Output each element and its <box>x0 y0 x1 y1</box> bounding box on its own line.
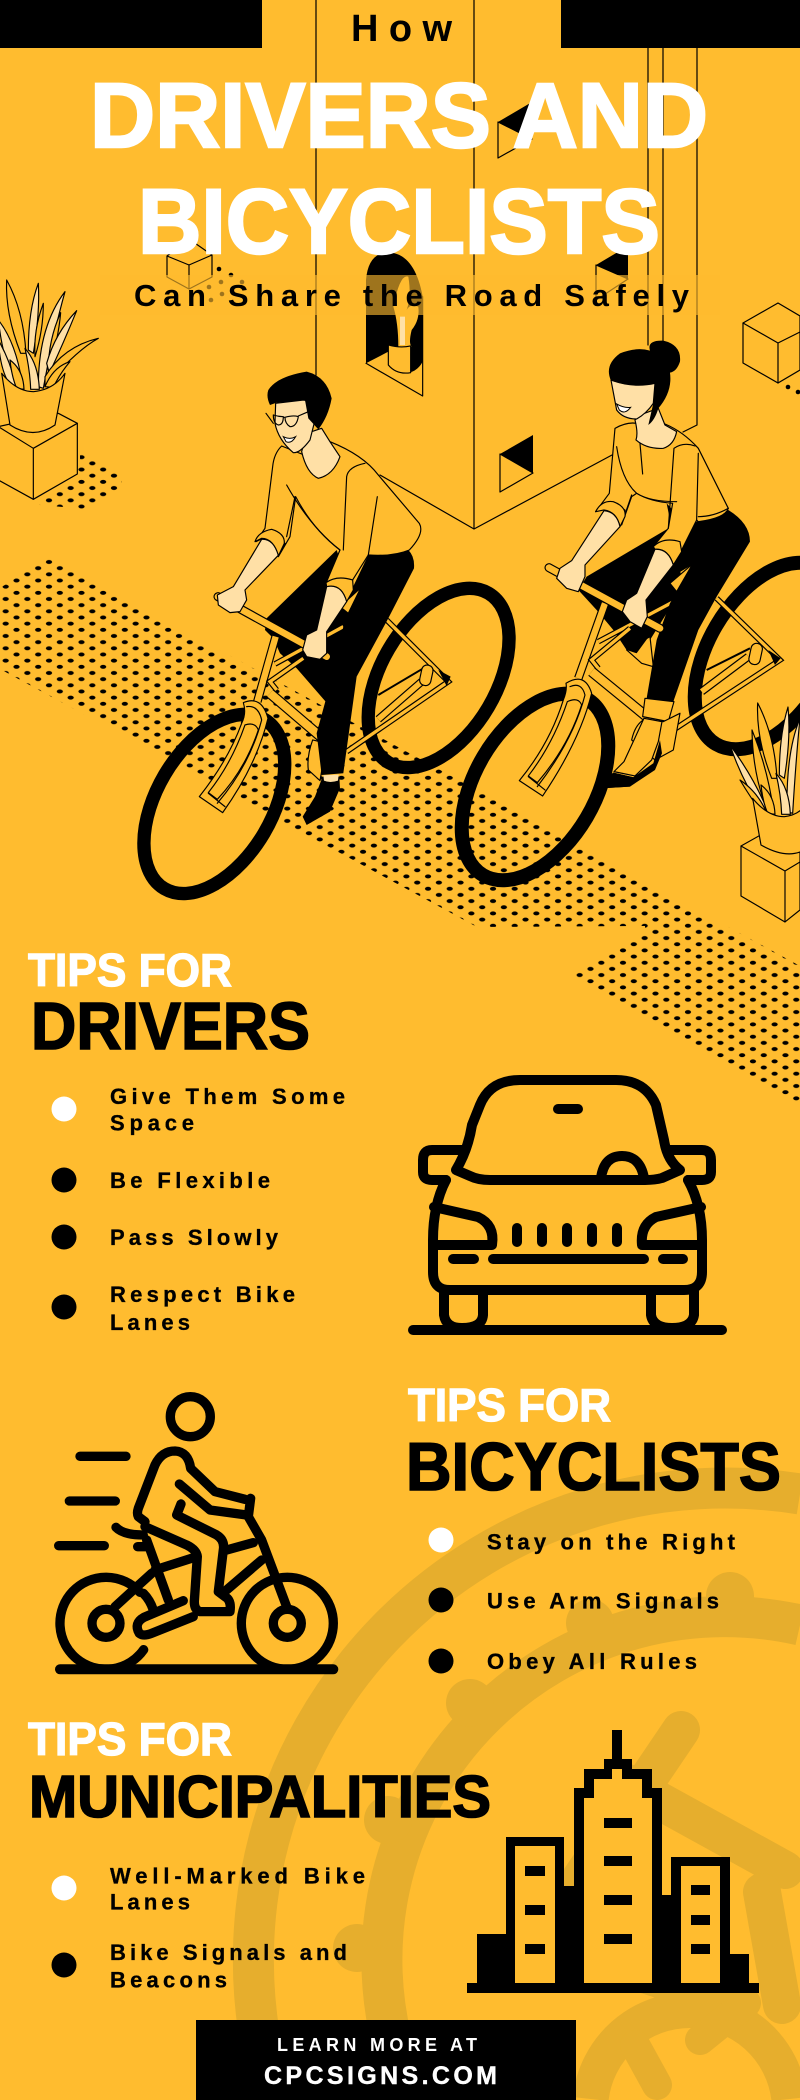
tip: give them some space: Space <box>110 1110 194 1136</box>
woman: frame tubes <box>578 600 677 717</box>
dotted road band <box>0 557 800 1104</box>
title: Bicyclists: BICYCLISTS <box>138 171 660 273</box>
woman: neckline <box>640 443 643 474</box>
heading: tips for drivers: TIPS FOR <box>28 944 232 996</box>
plant left on box <box>0 280 98 499</box>
man: back shoe <box>308 740 327 781</box>
man: hair <box>267 372 332 429</box>
man: frame tubes <box>257 627 343 737</box>
woman: shirt <box>596 423 728 550</box>
heading: tips for bicyclists <box>406 1379 781 1505</box>
heading: tips for bicyclists: TIPS FOR <box>408 1379 611 1431</box>
title: subtitle: Can Share the Road Safely <box>134 278 690 313</box>
cube near title <box>167 239 244 302</box>
man: seat spike <box>340 588 361 613</box>
heading: tips for municipalities <box>28 1713 491 1830</box>
woman: hair <box>609 341 680 425</box>
window: lower <box>500 435 533 492</box>
icon: car front <box>413 1080 722 1330</box>
icon: city buildings <box>467 1730 759 1993</box>
man: right arm <box>303 578 353 659</box>
illustration: isometric building <box>316 0 697 529</box>
man: mouth <box>283 437 296 442</box>
tip: bike signals and beacons <box>52 1940 347 1992</box>
illustration: man on bicycle <box>115 372 538 918</box>
plant right on box <box>730 703 800 922</box>
woman: rear frame <box>663 598 781 737</box>
woman: shoe <box>598 718 662 788</box>
panel: tips for bicyclists <box>406 1379 781 1674</box>
woman: fork <box>519 679 592 796</box>
woman: front wheel <box>431 668 639 906</box>
top bars <box>0 0 800 48</box>
woman: handlebar <box>549 568 660 628</box>
illustration: woman on bicycle <box>431 341 781 906</box>
dots near left box <box>34 449 122 509</box>
tip: bike signals and beacons: Bike Signals and <box>110 1940 347 1965</box>
illustration: woman on bicycle, back wheel <box>664 537 800 775</box>
tip: be flexible: Be Flexible <box>110 1168 270 1193</box>
footer: learn more <box>196 2020 576 2100</box>
tip: use arm signals: Use Arm Signals <box>487 1588 719 1614</box>
woman: trouser cuff and lower leg <box>632 698 680 760</box>
title: How: How <box>351 8 452 50</box>
tip: stay on the right: Stay on the Right <box>487 1530 736 1554</box>
man: left arm <box>217 529 284 613</box>
icon: cyclist <box>59 1397 333 1669</box>
tip: well-marked bike lanes: Lanes <box>110 1890 190 1914</box>
heading: tips for municipalities: TIPS FOR <box>28 1713 232 1765</box>
man: rear frame <box>347 620 451 752</box>
tip: give them some space <box>52 1084 345 1136</box>
woman: face <box>611 380 655 419</box>
woman: seat spike <box>670 564 693 592</box>
window: upper right <box>498 102 532 158</box>
woman: shoe sole over wheel <box>598 768 650 788</box>
heading: tips for drivers: DRIVERS <box>31 989 310 1064</box>
panel: tips for municipalities <box>28 1713 491 1992</box>
man: shoe <box>303 775 340 825</box>
title block <box>90 8 708 313</box>
man: back leg <box>265 550 363 707</box>
translucent band behind subtitle <box>100 275 720 315</box>
heading: tips for bicyclists: BICYCLISTS <box>406 1429 781 1505</box>
tip: respect bike lanes <box>52 1282 295 1335</box>
panel: tips for drivers <box>28 944 345 1335</box>
man: fork <box>199 701 268 813</box>
man: shirt <box>256 442 421 582</box>
watermark: large bicycle wheel <box>253 1488 800 2099</box>
tip: respect bike lanes: Lanes <box>110 1310 190 1335</box>
man: glasses <box>266 412 308 427</box>
woman: front leg <box>647 510 750 702</box>
heading: tips for drivers <box>28 944 310 1064</box>
man: face <box>275 400 315 453</box>
tip: respect bike lanes: Respect Bike <box>110 1282 295 1307</box>
tip: give them some space: Give Them Some <box>110 1084 345 1109</box>
title: Drivers and: DRIVERS AND <box>90 65 708 167</box>
man: neck <box>302 428 340 478</box>
window: right <box>596 246 628 300</box>
woman: mouth <box>617 404 631 412</box>
tip: obey all rules: Obey All Rules <box>487 1649 697 1674</box>
tip: bike signals and beacons: Beacons <box>110 1968 227 1992</box>
woman: right arm <box>622 540 682 628</box>
man: back wheel <box>339 564 538 792</box>
man: front leg <box>317 550 414 775</box>
tip: well-marked bike lanes <box>52 1864 365 1914</box>
tip: pass slowly: Pass Slowly <box>110 1225 279 1250</box>
woman: neck and chest <box>635 408 677 448</box>
tip: well-marked bike lanes: Well-Marked Bike <box>110 1864 365 1888</box>
window: arch with plant <box>366 252 423 396</box>
footer text: website: CPCSIGNS.COM <box>264 2062 497 2090</box>
cube right <box>743 303 800 394</box>
woman: left arm <box>557 501 625 592</box>
heading: tips for municipalities: MUNICIPALITIES <box>29 1764 491 1830</box>
woman: back leg <box>578 503 683 653</box>
man: front wheel <box>115 690 314 918</box>
man: handlebar <box>218 597 327 657</box>
footer text: learn more at: LEARN MORE AT <box>277 2035 477 2055</box>
